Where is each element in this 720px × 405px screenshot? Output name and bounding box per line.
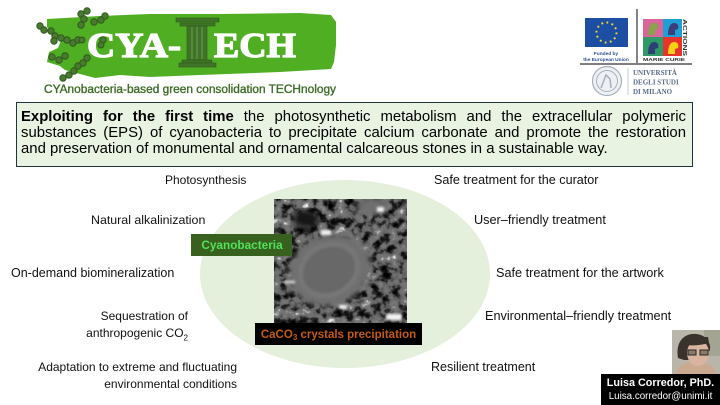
statement text: substances (EPS) of cyanobacteria to precipitate calcium carbonate and promote the restoration — [21, 125, 686, 141]
right benefit: user-friendly: User–friendly treatment — [474, 213, 606, 227]
presenter email: Luisa.corredor@unimi.it — [609, 391, 712, 402]
chain cells over the C — [98, 37, 106, 48]
right benefit: resilient: Resilient treatment — [431, 360, 535, 374]
logo subtitle: CYAnobacteria-based green consolidation TECHnology — [44, 82, 337, 96]
Marie Curie Actions logo: MARIE CURIE — [643, 57, 686, 63]
left benefit: sequestration of CO2: Sequestration of — [101, 309, 188, 323]
main statement box — [16, 102, 693, 167]
logo: CYA-TECH — [36, 7, 337, 96]
funded by EU caption: Funded by — [594, 51, 618, 57]
pale green ellipse — [200, 180, 490, 368]
Cyanobacteria label — [191, 234, 292, 256]
left benefit: adaptation: Adaptation to extreme and fluctuating — [38, 360, 237, 374]
Cyanobacteria label: Cyanobacteria — [201, 238, 283, 252]
portrait of presenter — [672, 330, 720, 374]
left benefit: adaptation: environmental conditions — [104, 377, 237, 391]
logo wordmark: CYA- — [87, 26, 181, 65]
statement text: Exploiting for the first time the photosynthetic metabolism and the extracellular polymeric — [21, 109, 686, 125]
Marie Curie Actions logo — [643, 19, 687, 63]
University of Milan name: DI MILANO — [633, 88, 673, 96]
right benefit: environmental-friendly: Environmental–friendly treatment — [485, 309, 671, 323]
logo green brush stroke — [47, 13, 336, 78]
right benefit: safe for artwork: Safe treatment for the artwork — [496, 266, 664, 280]
left benefit: sequestration of CO2: anthropogenic CO2 — [86, 326, 188, 342]
CaCO3 label: CaCO — [261, 329, 293, 341]
presenter name: Luisa Corredor, PhD. — [607, 377, 714, 389]
logo wordmark — [87, 26, 296, 65]
left benefit: natural alkalinization: Natural alkalinization — [91, 213, 205, 227]
statement text: and preservation of monumental and ornamental calcareous stones in a sustainable way. — [21, 141, 608, 157]
partner logos: the European Union — [583, 57, 629, 63]
left benefit: sequestration of CO2 — [86, 309, 188, 342]
logo column icon — [176, 18, 219, 67]
logo wordmark: ECH — [214, 26, 296, 65]
right benefit: safe for curator: Safe treatment for the curator — [434, 173, 598, 187]
CaCO3 label — [255, 323, 422, 345]
logo bacteria chains — [37, 8, 108, 81]
central ellipse and micrograph — [191, 180, 490, 368]
University of Milan name: UNIVERSITÀ — [633, 69, 677, 77]
statement text — [21, 109, 686, 157]
left benefit: photosynthesis: Photosynthesis — [165, 173, 246, 187]
CaCO3 label: 3 — [293, 333, 298, 342]
CaCO3 label: crystals precipitation — [297, 329, 416, 341]
micrograph: cyanobacterial cell with crystals — [274, 197, 407, 323]
University of Milan name: DEGLI STUDI — [633, 78, 679, 86]
Marie Curie Actions logo: ACTIONS — [681, 19, 687, 56]
logo column flutes — [192, 27, 202, 59]
left benefit: on-demand biomineralization: On-demand biomineralization — [11, 266, 174, 280]
left benefit: adaptation — [38, 360, 237, 391]
presenter name card — [601, 374, 720, 405]
University seal — [592, 66, 622, 96]
EU flag — [585, 18, 628, 47]
partner logos — [580, 9, 692, 96]
University of Milan name — [633, 69, 679, 96]
